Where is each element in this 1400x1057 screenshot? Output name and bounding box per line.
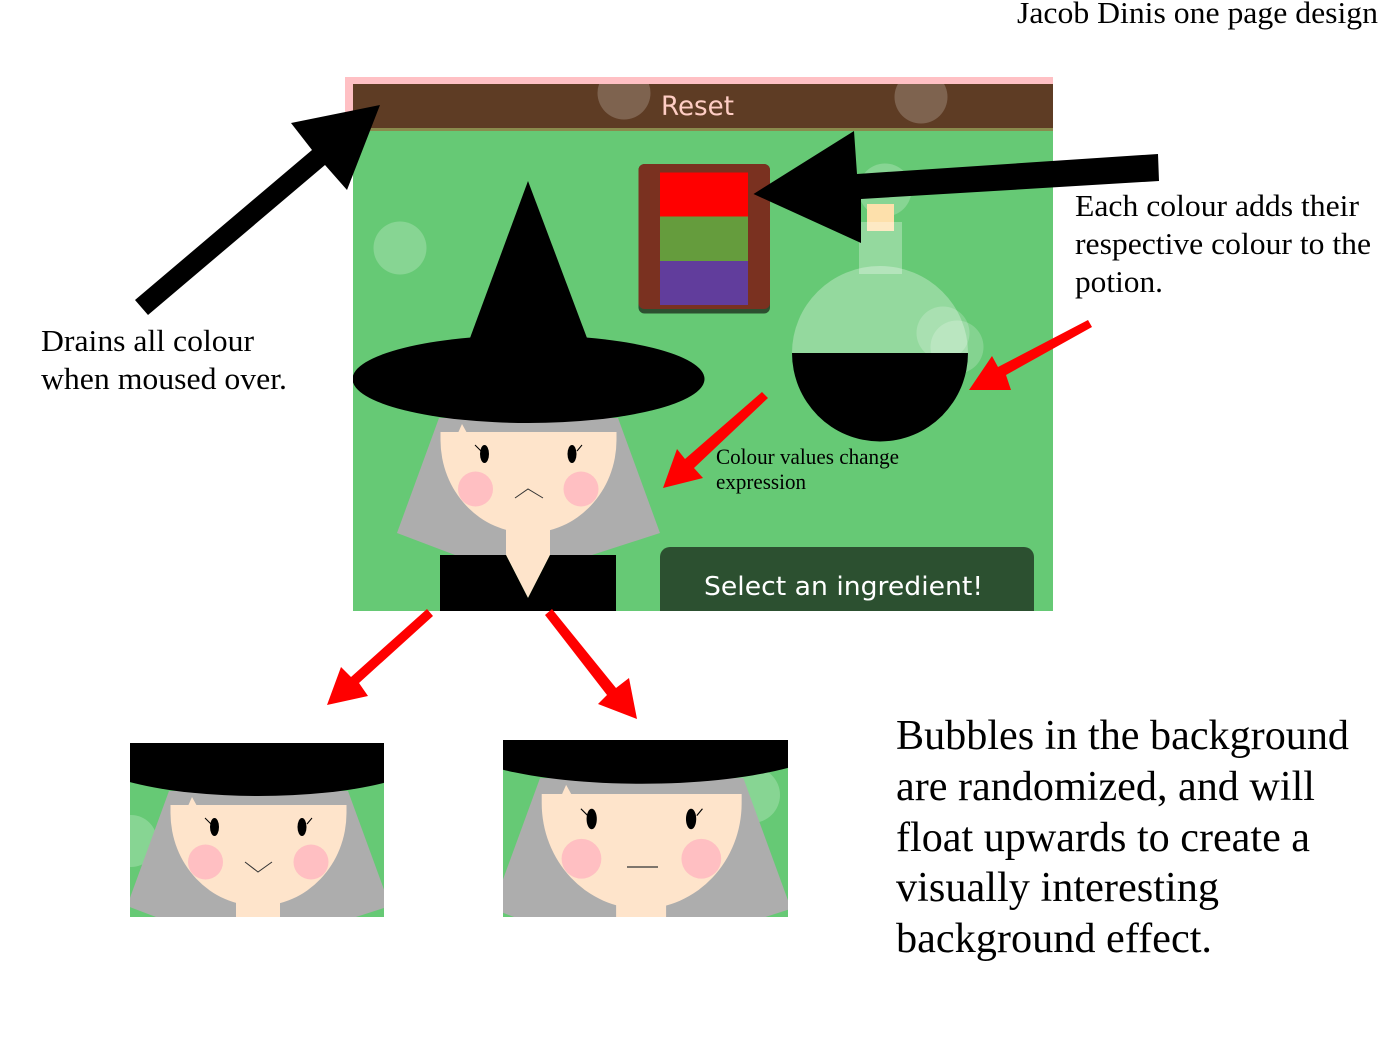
- text: colour note: respective colour to the: [1075, 226, 1371, 261]
- text: expression note: Colour values change: [716, 444, 899, 469]
- text: bubbles note: Bubbles in the background: [896, 713, 1349, 759]
- arrow: to reset bar: [135, 105, 380, 315]
- witch character: [352, 181, 704, 611]
- text: bubbles note: visually interesting: [896, 865, 1219, 911]
- ingredient palette: [638, 164, 770, 314]
- text: bubbles note: background effect.: [896, 916, 1212, 962]
- arrow: to expression: [663, 392, 768, 488]
- arrow: to flask: [969, 320, 1092, 390]
- text: reset note: Drains all colour: [41, 323, 255, 358]
- arrow: to palette: [754, 131, 1159, 243]
- message button: [660, 547, 1034, 611]
- potion flask: [792, 204, 984, 442]
- background bubbles: [374, 164, 912, 274]
- arrow: to neutral face: [545, 609, 637, 719]
- text: colour note: Each colour adds their: [1075, 188, 1360, 223]
- thumbnail: happy expression: [130, 743, 384, 917]
- text: expression note: expression: [716, 469, 806, 494]
- text: reset note: when moused over.: [41, 361, 287, 396]
- thumbnail: neutral expression: [503, 740, 788, 917]
- message button: Select an ingredient!: [704, 572, 983, 602]
- text: bubbles note: are randomized, and will: [896, 764, 1315, 810]
- arrow: to happy face: [327, 609, 433, 705]
- panel: game screen: [345, 66, 1053, 611]
- reset bar: Reset: [661, 91, 734, 122]
- text: bubbles note: float upwards to create a: [896, 815, 1310, 861]
- mouth: frown: [515, 489, 543, 498]
- text: colour note: potion.: [1075, 264, 1163, 299]
- reset bar: [353, 84, 1053, 131]
